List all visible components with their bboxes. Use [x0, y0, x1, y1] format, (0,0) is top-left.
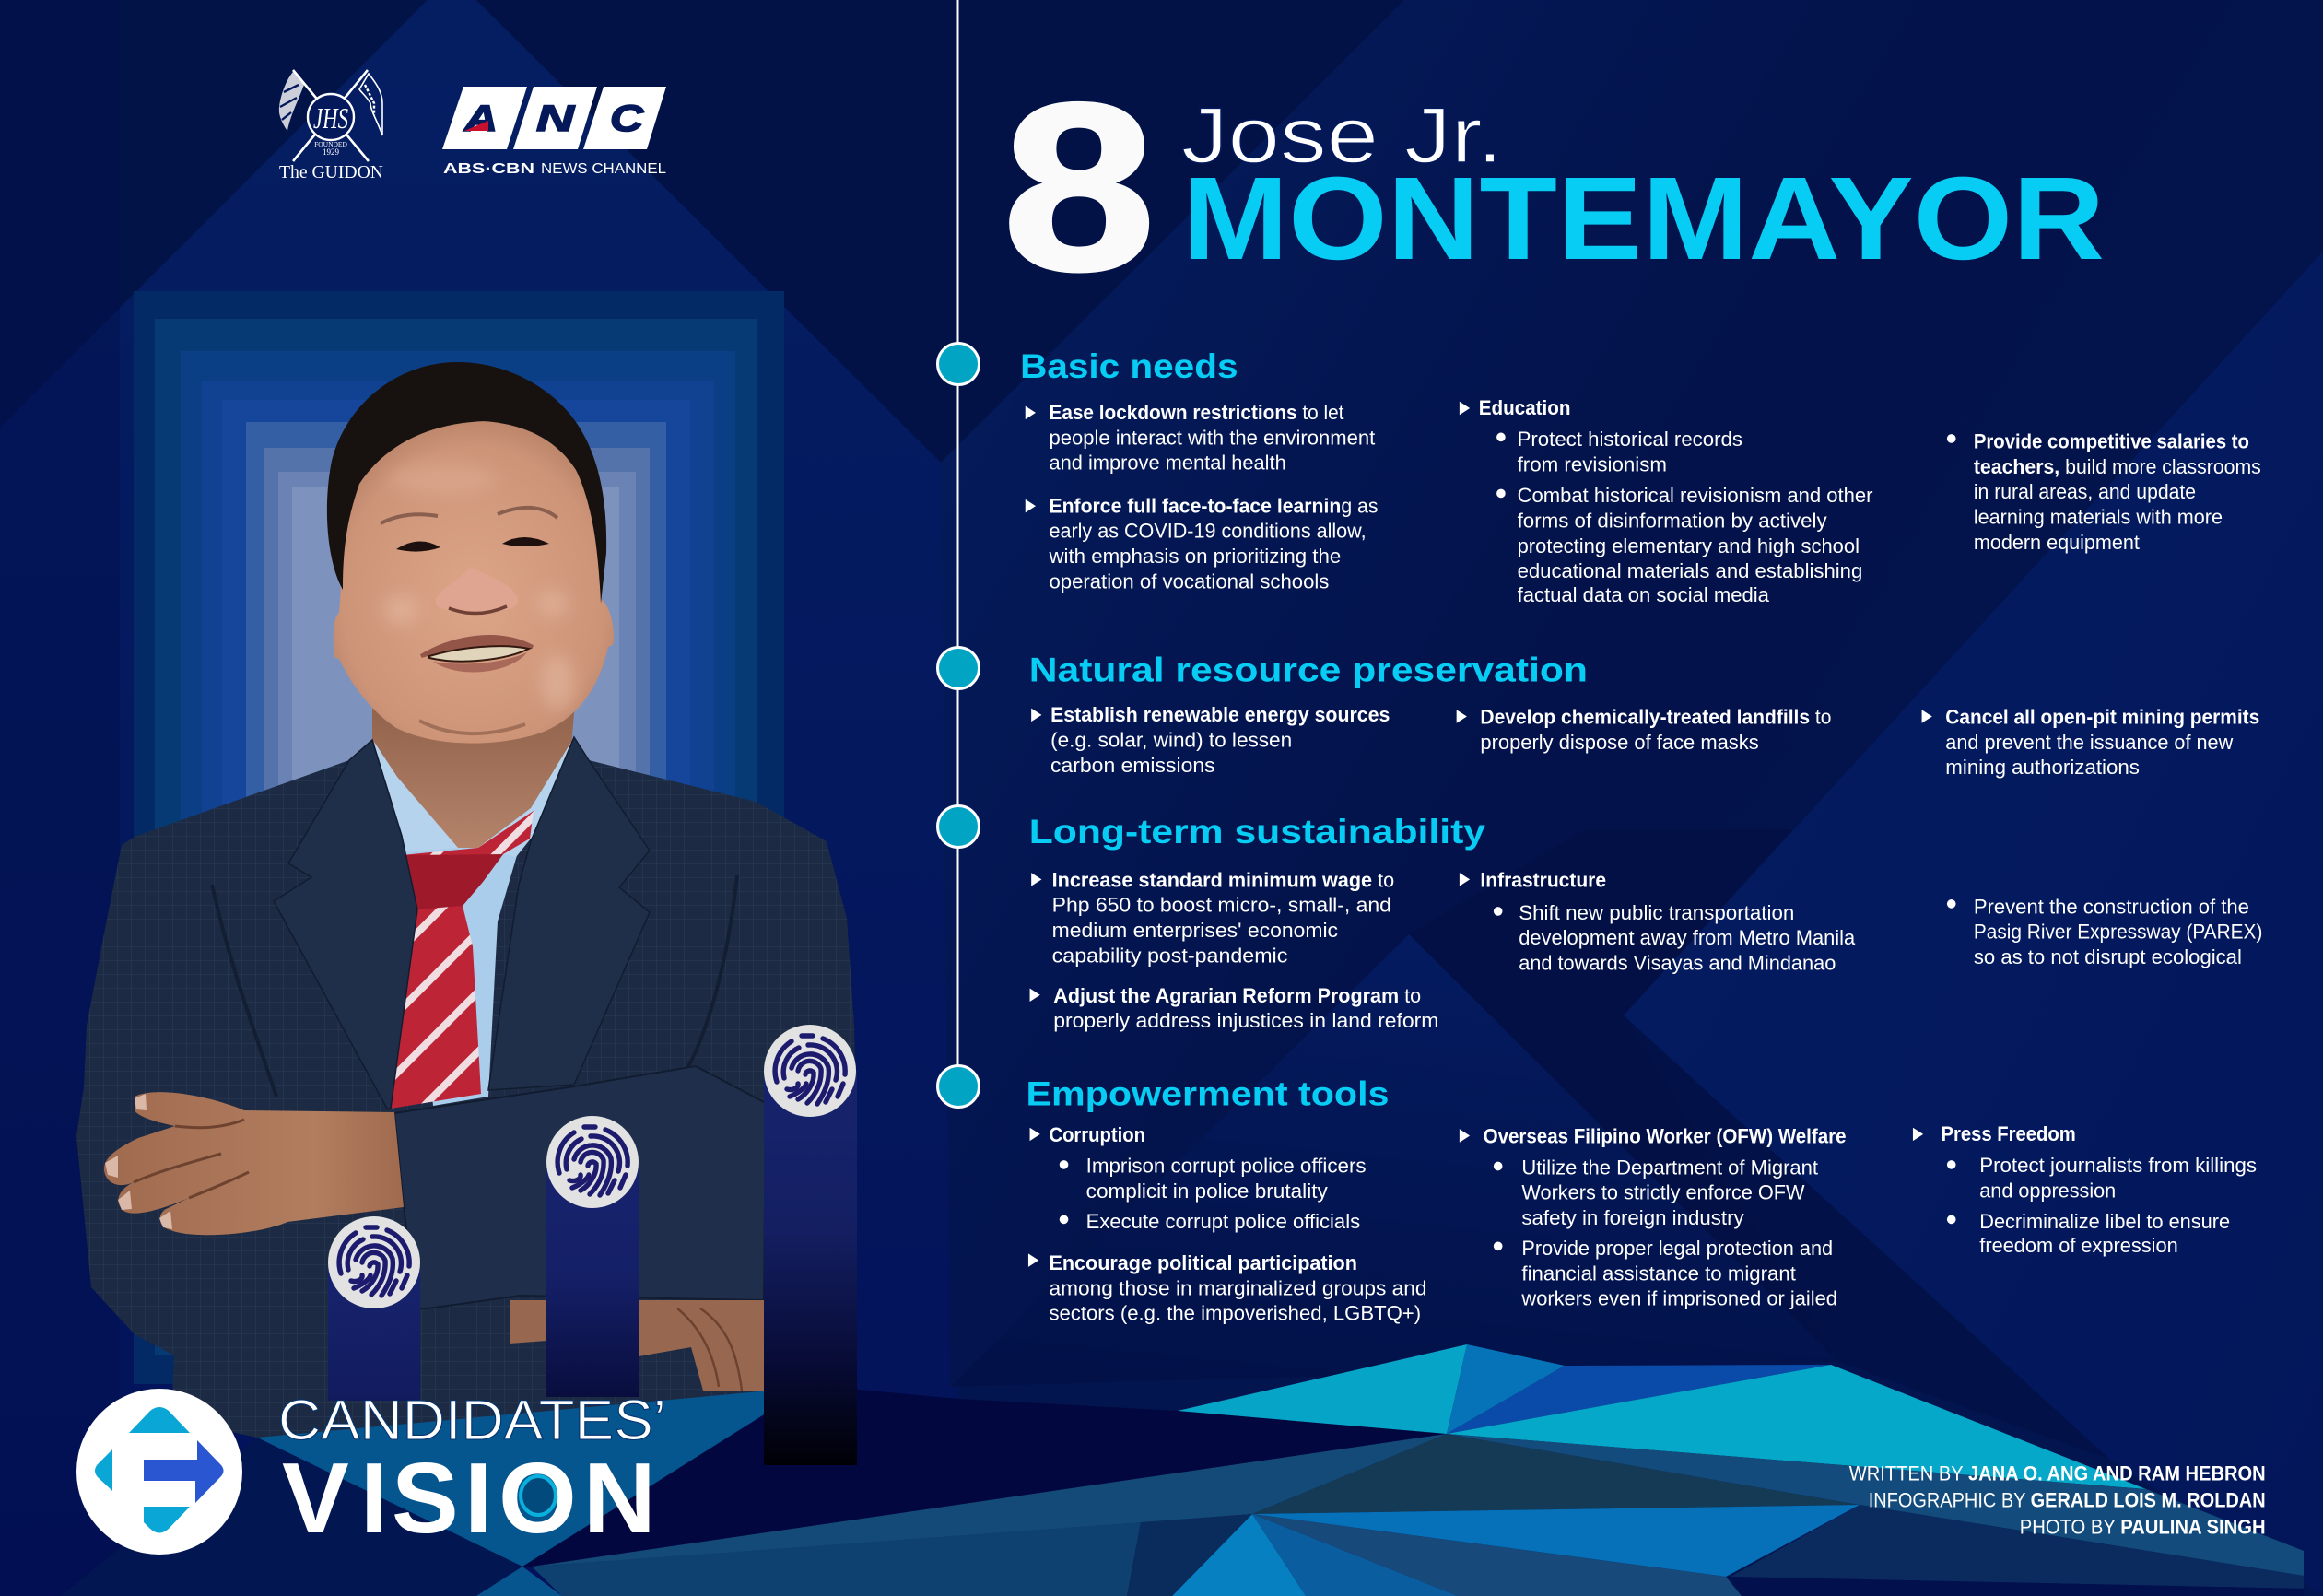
title: first name: Jose Jr.	[1181, 92, 1503, 180]
eyes	[396, 541, 440, 552]
column: press freedom: Protect journalists from killings	[1979, 1154, 2257, 1177]
column: infrastructure: Shift new public transportation	[1519, 901, 1794, 924]
column: education: forms of disinformation by actively	[1518, 509, 1827, 532]
forearm sleeve	[394, 1066, 766, 1308]
photo: candidate portrait	[76, 362, 857, 1474]
chin fold	[419, 721, 525, 733]
column: education: from revisionism	[1518, 452, 1667, 475]
column: OFW welfare: Utilize the Department of Migrant	[1521, 1156, 1819, 1179]
column: press freedom: freedom of expression	[1979, 1234, 2178, 1257]
column: landfills	[1457, 706, 1831, 754]
column: corruption and participation: sectors (e.g. the impoverished, LGBTQ+)	[1049, 1302, 1421, 1325]
column: wages and agrarian reform	[1030, 868, 1438, 1032]
column: mining	[1922, 706, 2259, 779]
column: infrastructure: development away from Metro Manila	[1519, 926, 1856, 949]
logo: The Guidon: 1929	[323, 147, 339, 157]
column: corruption and participation: Execute corrupt police officials	[1086, 1210, 1360, 1233]
column: landfills: Develop chemically-treated landfills to	[1480, 706, 1831, 729]
column: OFW welfare: workers even if imprisoned or jailed	[1520, 1287, 1837, 1310]
logo: ANC: ABS·CBN	[443, 161, 534, 177]
column: wages and agrarian reform: Adjust the Agrarian Reform Program to	[1053, 984, 1421, 1007]
column: mining: and prevent the issuance of new	[1945, 731, 2234, 754]
column: lockdown and learning	[1026, 401, 1378, 593]
column: wages and agrarian reform: Increase standard minimum wage to	[1052, 868, 1394, 891]
hair underlay	[350, 396, 599, 553]
section: Long-term sustainability	[1029, 813, 2262, 1032]
icon: fingerprint 1	[328, 1216, 420, 1308]
forehead highlight	[387, 463, 498, 496]
column: corruption and participation: Corruption	[1049, 1123, 1145, 1146]
icon: fingerprint 3	[764, 1025, 856, 1117]
column: corruption and participation: among those in marginalized groups and	[1049, 1276, 1427, 1299]
column: renewable energy: Establish renewable energy sources	[1050, 703, 1390, 726]
column: press freedom: Press Freedom	[1941, 1122, 2076, 1145]
column: mining: Cancel all open-pit mining permits	[1945, 706, 2259, 729]
wordmark: Candidates' Vision	[278, 1389, 666, 1555]
column: corruption and participation: complicit in police brutality	[1086, 1179, 1329, 1203]
timeline dot 1	[938, 343, 979, 385]
shirt collar	[374, 742, 571, 857]
cheek highlights	[384, 591, 574, 710]
logo: ANC: NEWS CHANNEL	[541, 161, 666, 177]
heading: Long-term sustainability: Long-term sustainability	[1029, 813, 1486, 851]
bar: fingerprint column 3	[764, 1071, 857, 1465]
column: education: Combat historical revisionism and other	[1518, 484, 1873, 507]
heading: Natural resource preservation: Natural resource preservation	[1029, 651, 1588, 689]
column: education: protecting elementary and high school	[1518, 534, 1860, 557]
timeline dot 2	[938, 647, 979, 689]
title: surname: MONTEMAYOR	[1182, 153, 2105, 285]
bar: fingerprint column 1	[328, 1262, 420, 1401]
column: education: educational materials and establishing	[1518, 559, 1862, 582]
section: Basic needs	[1020, 347, 2261, 606]
heading: Empowerment tools: Empowerment tools	[1027, 1075, 1389, 1113]
column: teachers: modern equipment	[1974, 531, 2141, 554]
column: infrastructure: and towards Visayas and Mindanao	[1519, 951, 1836, 974]
column: lockdown and learning: Ease lockdown restrictions to let	[1049, 401, 1344, 424]
credits	[1849, 1461, 2266, 1538]
logo: ANC	[442, 87, 666, 177]
column: teachers: in rural areas, and update	[1974, 480, 2196, 503]
column: teachers	[1947, 429, 2261, 554]
column: renewable energy: (e.g. solar, wind) to lessen	[1050, 728, 1292, 751]
logo: The Guidon: JHS	[313, 101, 348, 135]
logo: The Guidon	[279, 70, 383, 182]
suit jacket	[76, 760, 857, 1474]
sleeve folds	[212, 875, 737, 1097]
title: candidate number: 8	[1003, 53, 1156, 320]
column: renewable energy	[1031, 703, 1390, 777]
column: lockdown and learning: people interact with the environment	[1049, 426, 1376, 449]
column: press freedom: Decriminalize libel to ensure	[1979, 1210, 2230, 1233]
column: Pasig River Expressway: Pasig River Expressway (PAREX)	[1974, 921, 2262, 944]
logo: The Guidon: The GUIDON	[279, 162, 383, 182]
logo: Candidates' Vision emblem	[76, 1389, 242, 1555]
column: OFW welfare	[1460, 1125, 1847, 1310]
logo: ANC: A	[463, 99, 498, 139]
column: education: factual data on social media	[1518, 583, 1769, 606]
eyebrows	[381, 508, 557, 523]
neck	[372, 691, 576, 848]
mouth	[421, 637, 533, 672]
column: OFW welfare: financial assistance to migrant	[1521, 1262, 1797, 1285]
column: wages and agrarian reform: properly address injustices in land reform	[1053, 1009, 1438, 1032]
column: Pasig River Expressway: so as to not disrupt ecological	[1974, 945, 2242, 968]
column: press freedom	[1913, 1122, 2257, 1257]
timeline line	[956, 0, 958, 1078]
heading: Basic needs: Basic needs	[1020, 347, 1238, 385]
column: lockdown and learning: early as COVID-19 conditions allow,	[1049, 520, 1367, 543]
column: mining: mining authorizations	[1945, 756, 2140, 779]
column: corruption and participation: Imprison corrupt police officers	[1086, 1155, 1367, 1178]
column: press freedom: and oppression	[1979, 1179, 2116, 1202]
logo: ANC: C	[610, 99, 644, 139]
column: teachers: Provide competitive salaries to	[1974, 429, 2249, 452]
column: lockdown and learning: Enforce full face-to-face learning as	[1049, 494, 1378, 517]
column: education	[1460, 396, 1873, 606]
section: Natural resource preservation	[1029, 651, 2259, 779]
column: teachers: teachers, build more classrooms	[1974, 455, 2261, 478]
icon: fingerprint 2	[546, 1116, 639, 1208]
tie	[391, 811, 534, 1109]
section: Empowerment tools	[1027, 1075, 2257, 1325]
column: infrastructure	[1460, 868, 1856, 974]
lapel right	[488, 737, 650, 1090]
credits: INFOGRAPHIC BY GERALD LOIS M. ROLDAN	[1869, 1488, 2266, 1511]
column: lockdown and learning: with emphasis on prioritizing the	[1048, 545, 1341, 568]
column: wages and agrarian reform: Php 650 to boost micro-, small-, and	[1052, 894, 1391, 917]
credits: WRITTEN BY JANA O. ANG AND RAM HEBRON	[1849, 1461, 2266, 1485]
column: OFW welfare: Workers to strictly enforce OFW	[1521, 1181, 1805, 1204]
column: renewable energy: carbon emissions	[1050, 754, 1215, 777]
column: teachers: learning materials with more	[1974, 505, 2223, 528]
credits: PHOTO BY PAULINA SINGH	[2020, 1515, 2266, 1538]
column: wages and agrarian reform: medium enterprises' economic	[1052, 919, 1338, 942]
logo: The Guidon: FOUNDED	[314, 140, 347, 148]
face	[334, 421, 614, 744]
column: Pasig River Expressway: Prevent the construction of the	[1974, 895, 2249, 918]
bottom polygon artwork	[61, 1344, 2304, 1596]
column: OFW welfare: Overseas Filipino Worker (OFW) Welfare	[1484, 1125, 1847, 1148]
column: OFW welfare: Provide proper legal protection and	[1521, 1237, 1833, 1260]
column: corruption and participation	[1028, 1123, 1427, 1325]
logo: ANC: N	[536, 99, 576, 139]
column: wages and agrarian reform: capability post-pandemic	[1052, 944, 1287, 967]
right hand	[639, 1300, 764, 1391]
wordmark: Candidates' Vision: VISION	[282, 1442, 656, 1555]
timeline dot 4	[938, 1065, 979, 1108]
wrist	[510, 1300, 546, 1344]
timeline dot 3	[938, 805, 979, 848]
column: infrastructure: Infrastructure	[1480, 868, 1606, 891]
column: OFW welfare: safety in foreign industry	[1521, 1206, 1744, 1229]
column: Pasig River Expressway	[1947, 895, 2262, 968]
panel: concentric rectangles behind portrait	[134, 291, 784, 1384]
bar: fingerprint column 2	[546, 1162, 639, 1397]
lapel left	[274, 740, 417, 1109]
shirt	[372, 740, 571, 1106]
left hand	[104, 1092, 404, 1235]
hair	[327, 362, 606, 604]
column: education: Education	[1479, 396, 1570, 419]
column: corruption and participation: Encourage political participation	[1049, 1251, 1357, 1274]
column: lockdown and learning: operation of vocational schools	[1049, 569, 1329, 593]
nose	[436, 567, 518, 613]
column: education: Protect historical records	[1518, 428, 1742, 451]
text content	[1020, 347, 2266, 1538]
column: landfills: properly dispose of face masks	[1480, 731, 1759, 754]
column: lockdown and learning: and improve mental health	[1049, 452, 1286, 475]
wordmark: Candidates' Vision: CANDIDATES’	[278, 1389, 666, 1451]
